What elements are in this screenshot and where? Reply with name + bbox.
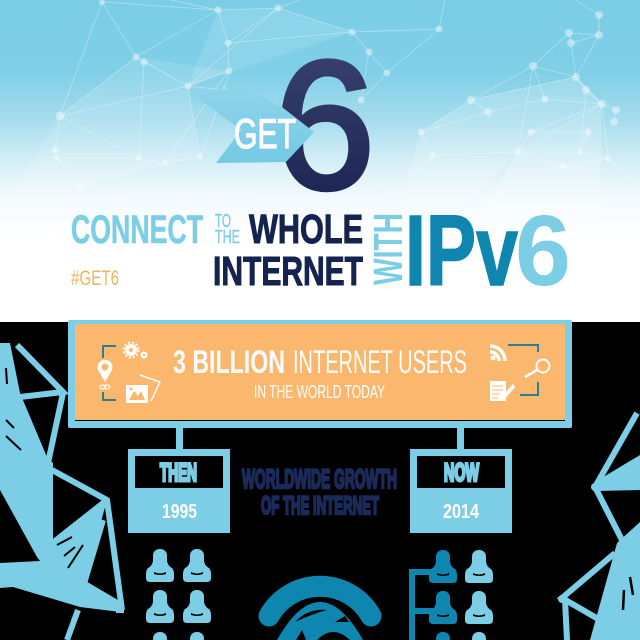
center heading: WORLDWIDE GROWTH [242, 464, 397, 494]
center heading [242, 464, 397, 520]
panel fill [75, 324, 565, 420]
panel frame [68, 320, 572, 428]
headline [71, 195, 571, 307]
headline word: INTERNET: INTERNET [213, 248, 363, 294]
icon: magnifier [525, 360, 550, 377]
hashtag: #GET6 [71, 267, 119, 290]
network graphic: right [558, 413, 640, 640]
label: then: THEN [160, 459, 197, 487]
network graphic: top [30, 0, 630, 210]
panel heading: 3 BILLION [173, 344, 285, 380]
icon: photos [126, 375, 160, 403]
icon: RSS [490, 346, 505, 361]
logo word GET: GET [234, 110, 296, 157]
center heading: OF THE INTERNET [261, 492, 379, 520]
headline words: TO THE: TO [215, 211, 231, 231]
panel: then 1995 [128, 449, 230, 533]
icon: globe arc [269, 586, 371, 640]
headline words: TO THE [215, 211, 240, 247]
headline word: CONNECT: CONNECT [71, 208, 203, 252]
network graphic: left [0, 343, 124, 640]
icon group: left [98, 342, 160, 403]
headline word: WITH: WITH [365, 213, 411, 285]
icon: notepad and pencil [490, 381, 515, 401]
headline words: TO THE: THE [215, 227, 240, 247]
icon: map pin [98, 360, 112, 389]
year: 2014: 2014 [443, 501, 480, 523]
headline word: IPv: IPv [405, 195, 518, 307]
header background [0, 0, 640, 322]
logo: GET6 [190, 23, 375, 227]
headline numeral: 6: 6 [515, 195, 571, 307]
label: now: NOW [444, 459, 479, 487]
panel: now 2014 [410, 449, 512, 533]
icon: gears [124, 342, 148, 358]
logo numeral 6: 6 [274, 23, 375, 227]
connector stem: 2014 [457, 428, 464, 450]
year: 1995: 1995 [162, 501, 197, 523]
people icons: 1995 [146, 549, 211, 640]
panel: 3 billion internet users [68, 320, 572, 428]
icon group: right [490, 345, 550, 401]
headline word: WHOLE: WHOLE [249, 206, 363, 252]
connector stem: 1995 [176, 428, 183, 450]
panel heading continuation: INTERNET USERS [293, 344, 467, 380]
panel subheading: IN THE WORLD TODAY [254, 382, 385, 402]
logo chevron [190, 87, 314, 163]
people icons: 2014 [412, 550, 493, 640]
